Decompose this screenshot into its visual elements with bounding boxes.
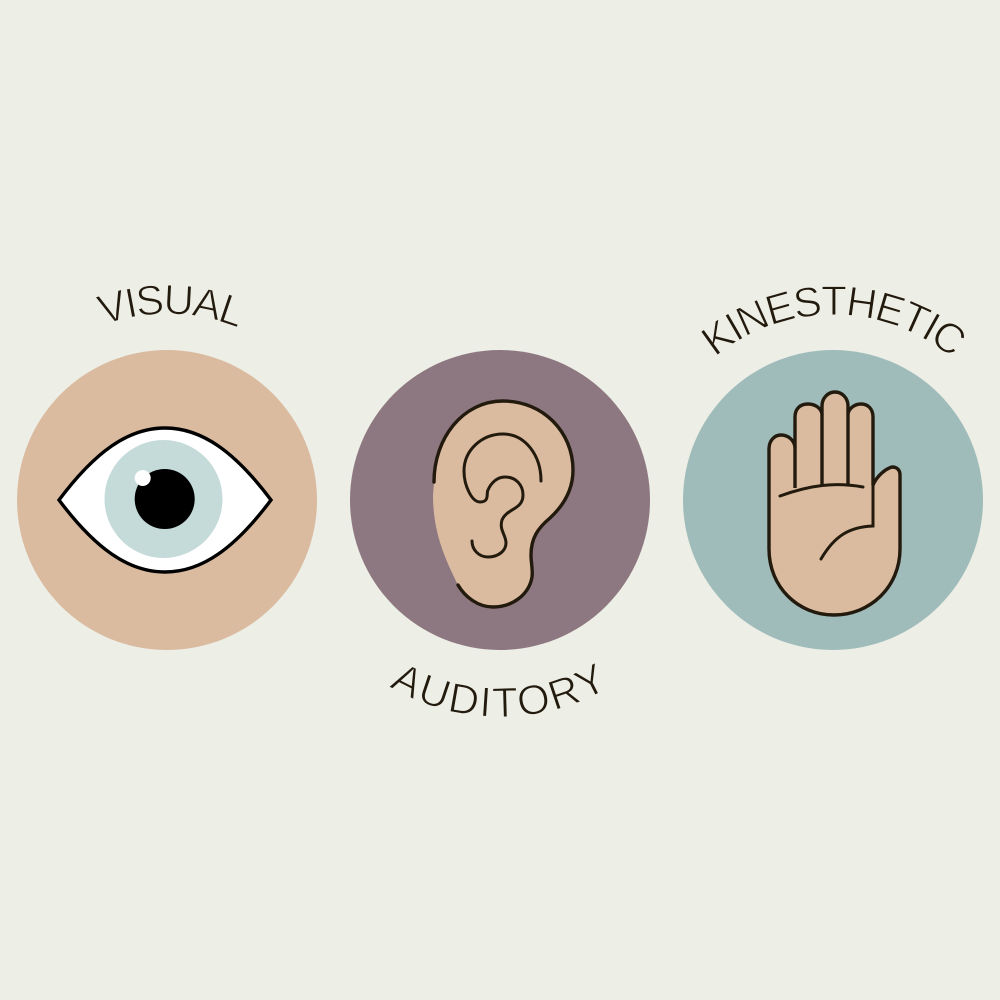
icon: eye <box>59 428 271 572</box>
label: KINESTHETIC: KINESTHETIC <box>702 286 964 354</box>
panel: kinesthetic <box>683 286 983 650</box>
panel: auditory <box>350 350 650 716</box>
circle: visual <box>17 350 317 650</box>
label: VISUAL: VISUAL <box>96 286 238 327</box>
circle: auditory <box>350 350 650 650</box>
icon: ear <box>433 401 573 607</box>
panel: visual <box>17 286 317 650</box>
circle: kinesthetic <box>683 350 983 650</box>
icon: hand <box>769 392 900 615</box>
label: AUDITORY: AUDITORY <box>390 664 598 716</box>
